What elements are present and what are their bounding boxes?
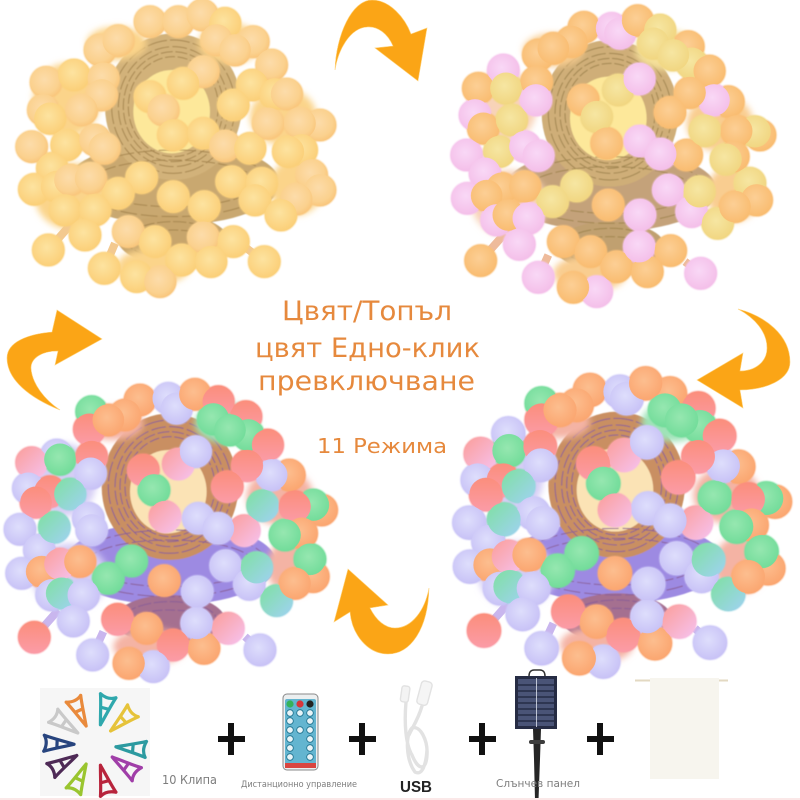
caption: USB: USB — [400, 779, 432, 796]
arrow: right — [697, 309, 790, 408]
arrow: left — [7, 310, 102, 410]
warm and pink light cluster — [451, 5, 776, 307]
icon: solar panel — [515, 670, 557, 800]
caption: remote control: Дистанционно управление — [241, 780, 357, 790]
plus sign 2 — [349, 723, 376, 755]
title: Цвят/Топъл — [282, 296, 452, 327]
caption: clips: 10 Клипа — [162, 772, 217, 787]
bottom edge strip — [0, 798, 800, 800]
warm white light cluster — [16, 0, 336, 297]
plus sign 1 — [218, 723, 245, 755]
icon: storage bag — [635, 678, 728, 779]
plus sign 3 — [469, 723, 496, 755]
title: превключване — [258, 366, 475, 397]
arrow: bottom — [334, 569, 429, 654]
arrow: top — [335, 0, 427, 81]
subtitle: modes: 11 Режима — [317, 434, 447, 458]
plus sign 4 — [587, 723, 614, 755]
multicolour light cluster, lower left — [4, 379, 337, 682]
accessory: clips — [40, 688, 150, 796]
icon: USB cable — [400, 680, 433, 773]
icon: remote control — [283, 694, 318, 770]
caption: solar panel: Слънчев панел — [496, 777, 580, 790]
multicolour light cluster, lower right — [453, 367, 791, 678]
title — [255, 296, 480, 397]
title: цвят Едно-клик — [255, 333, 480, 364]
